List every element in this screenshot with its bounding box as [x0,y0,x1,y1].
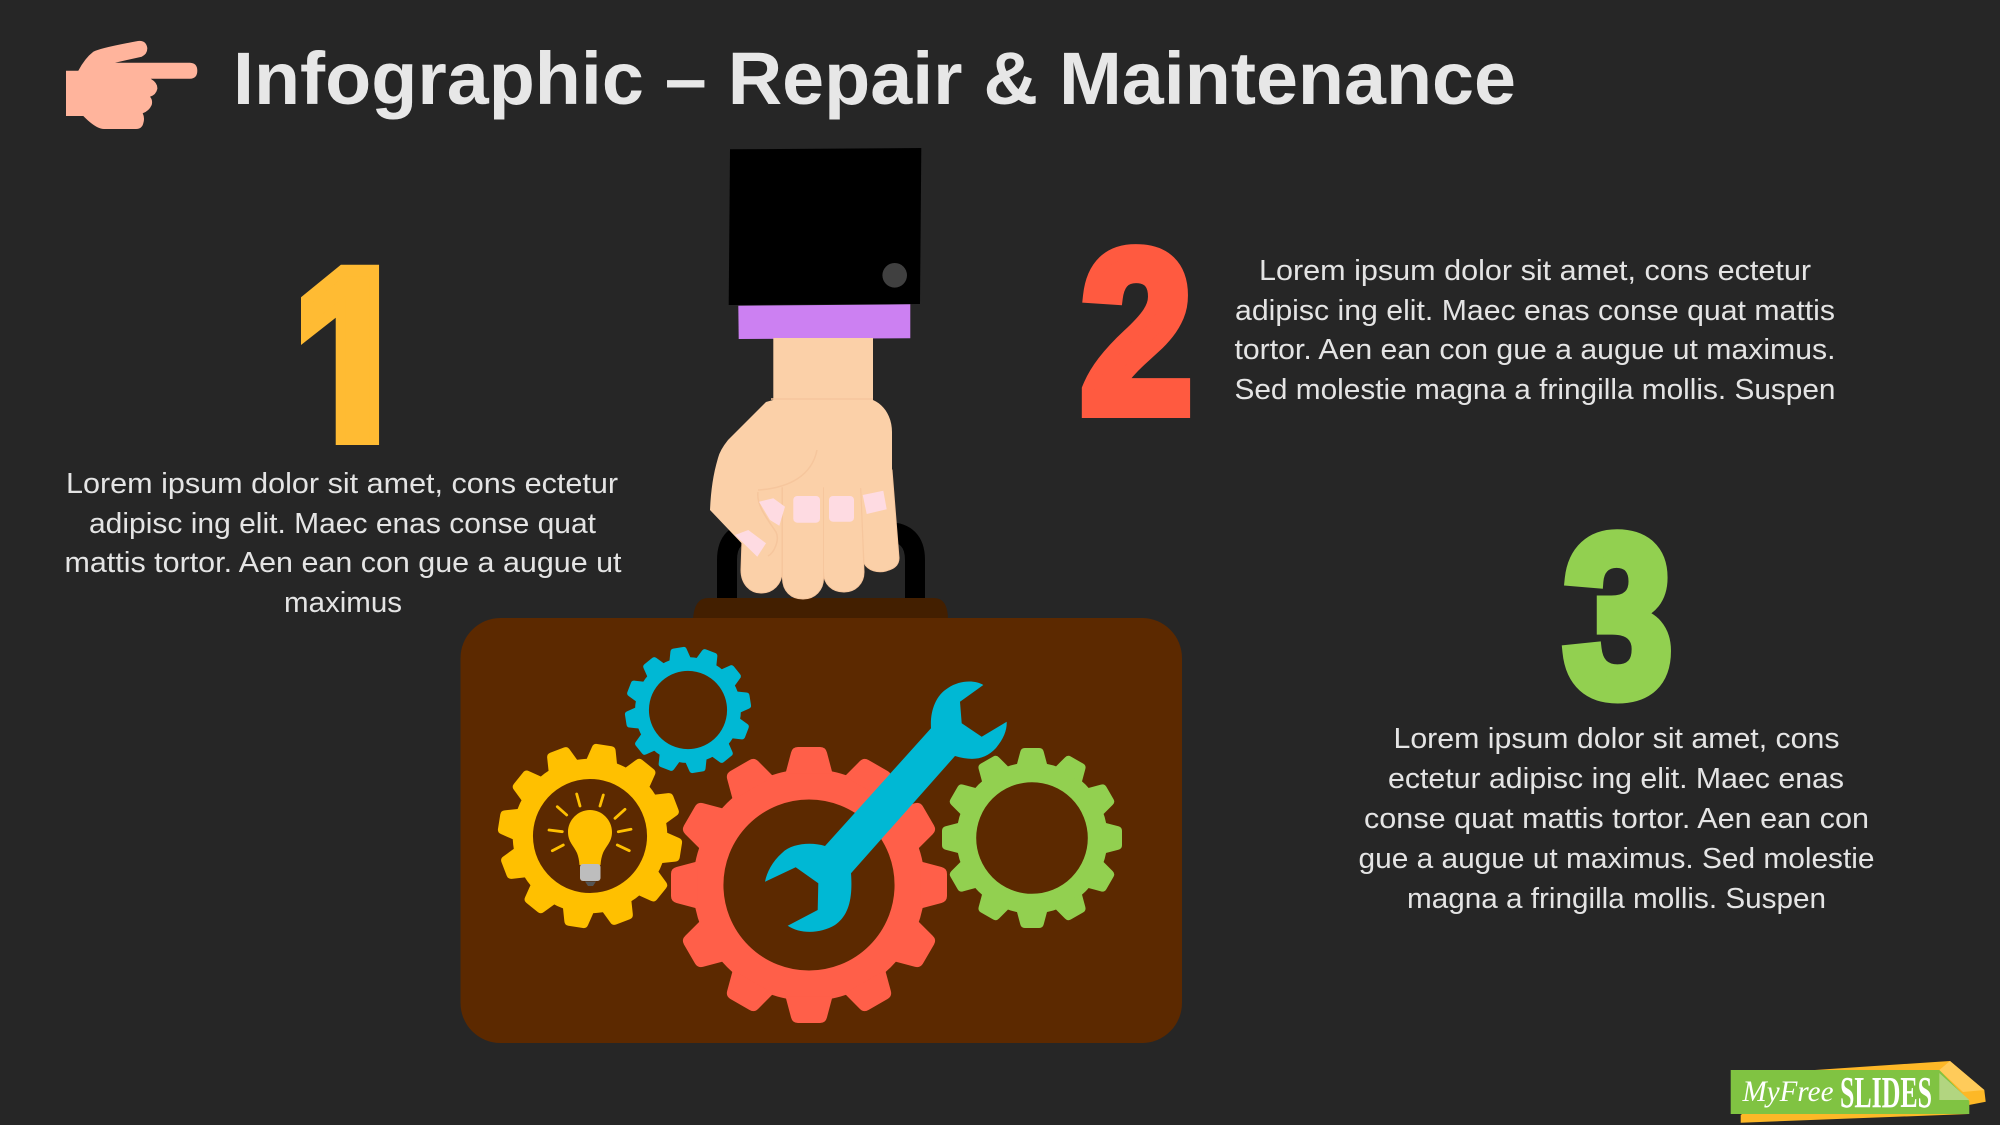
text block 2: Sed molestie magna a fringilla mollis. Suspen [1234,374,1836,406]
gear: yellow [485,731,695,941]
text block 3 [1358,723,1874,915]
text block 1 [64,468,622,619]
shirt cuff [738,304,910,339]
text block 2 [1234,255,1836,406]
fingers [741,470,899,599]
case body [460,618,1182,1043]
text block 3: conse quat mattis tortor. Aen ean con [1364,803,1869,835]
briefcase handle [727,532,915,598]
text block 3: Lorem ipsum dolor sit amet, cons [1394,723,1840,755]
logo: MyFree Slides [1731,1061,1986,1123]
text block 1: maximus [284,587,402,619]
title: Infographic – Repair & Maintenance [233,37,1516,120]
text block 2: Lorem ipsum dolor sit amet, cons ectetur [1259,255,1811,287]
logo: MyFree Slides: MyFree [1742,1075,1834,1108]
icon: light bulb [549,794,631,886]
palm and thumb [710,400,892,557]
handle base [693,598,948,620]
text block 2: adipisc ing elit. Maec enas conse quat mattis [1235,295,1835,327]
gear: blue [616,638,760,782]
text block 1: Lorem ipsum dolor sit amet, cons ectetur [66,468,618,500]
gear: red [671,747,947,1023]
text block 3: gue a augue ut maximus. Sed molestie [1358,843,1874,875]
briefcase illustration [460,532,1182,1043]
text block 2: tortor. Aen ean con gue a augue ut maximus. [1234,334,1836,366]
text block 1: adipisc ing elit. Maec enas conse quat [89,508,596,540]
sleeve [729,148,921,305]
wrist [773,338,873,401]
icon: pointing hand [66,41,197,129]
text block 3: ectetur adipisc ing elit. Maec enas [1388,763,1844,795]
logo: MyFree Slides: SLIDES [1840,1068,1932,1117]
arm and hand [710,148,921,599]
gear: green [942,748,1122,928]
number 1: 1 [283,203,420,550]
number 2: 2 [1081,204,1192,460]
nails [735,491,887,557]
icon: wrench [765,682,1007,932]
text block 3: magna a fringilla mollis. Suspen [1407,883,1826,915]
text block 1: mattis tortor. Aen ean con gue a augue ut [64,547,622,579]
number 3: 3 [1564,489,1672,742]
knuckle creases [758,399,873,556]
sleeve button [882,263,907,288]
